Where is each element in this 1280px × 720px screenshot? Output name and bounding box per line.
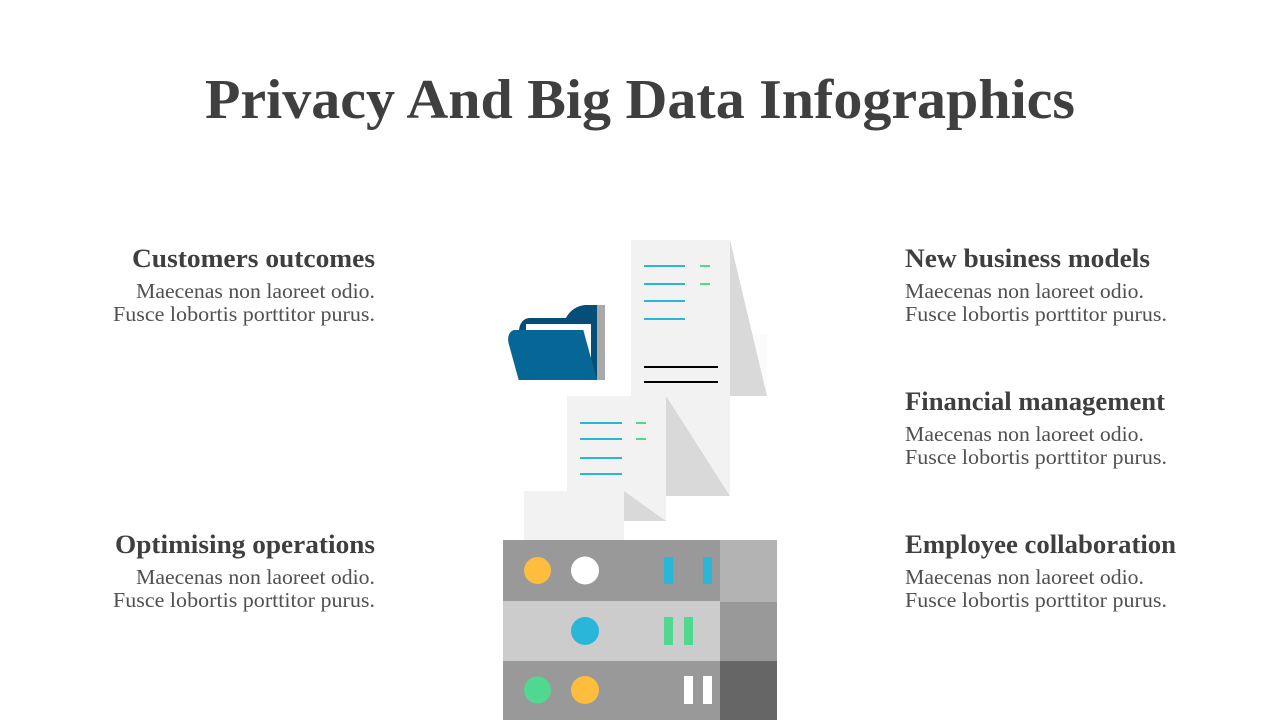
body: optimising operations: Fusce lobortis porttitor purus.	[113, 588, 375, 612]
text block: optimising operations	[113, 530, 375, 612]
body: new business models: Fusce lobortis porttitor purus.	[905, 302, 1167, 326]
body: financial management	[905, 422, 1167, 469]
icon: small document	[524, 491, 624, 540]
server row 1	[503, 540, 777, 602]
body: financial management: Fusce lobortis porttitor purus.	[905, 445, 1167, 469]
text block: financial management	[905, 387, 1167, 469]
body: employee collaboration: Fusce lobortis porttitor purus.	[905, 588, 1167, 612]
body: new business models: Maecenas non laoreet odio.	[905, 279, 1144, 303]
body: optimising operations: Maecenas non laoreet odio.	[136, 565, 375, 589]
icon: folder	[508, 305, 605, 380]
body: optimising operations	[113, 565, 375, 612]
icon: tall document	[631, 240, 767, 496]
icon: server stack	[503, 540, 777, 720]
text block: employee collaboration	[905, 530, 1177, 612]
body: customers outcomes: Maecenas non laoreet odio.	[136, 279, 375, 303]
heading: optimising operations: Optimising operations	[115, 530, 375, 559]
central illustration: documents, folder and server	[503, 240, 777, 720]
body: employee collaboration	[905, 565, 1167, 612]
title: Privacy And Big Data Infographics	[205, 69, 1075, 131]
body: customers outcomes	[113, 279, 375, 326]
server row 3	[503, 661, 777, 720]
text block: new business models	[905, 244, 1167, 326]
icon: middle document	[567, 396, 666, 521]
heading: new business models: New business models	[905, 244, 1150, 273]
body: financial management: Maecenas non laoreet odio.	[905, 422, 1144, 446]
body: new business models	[905, 279, 1167, 326]
heading: employee collaboration: Employee collaboration	[905, 530, 1177, 559]
heading: customers outcomes: Customers outcomes	[132, 244, 375, 273]
body: employee collaboration: Maecenas non laoreet odio.	[905, 565, 1144, 589]
heading: financial management: Financial management	[905, 387, 1165, 416]
text block: customers outcomes	[113, 244, 375, 326]
server row 2	[503, 601, 777, 661]
body: customers outcomes: Fusce lobortis porttitor purus.	[113, 302, 375, 326]
